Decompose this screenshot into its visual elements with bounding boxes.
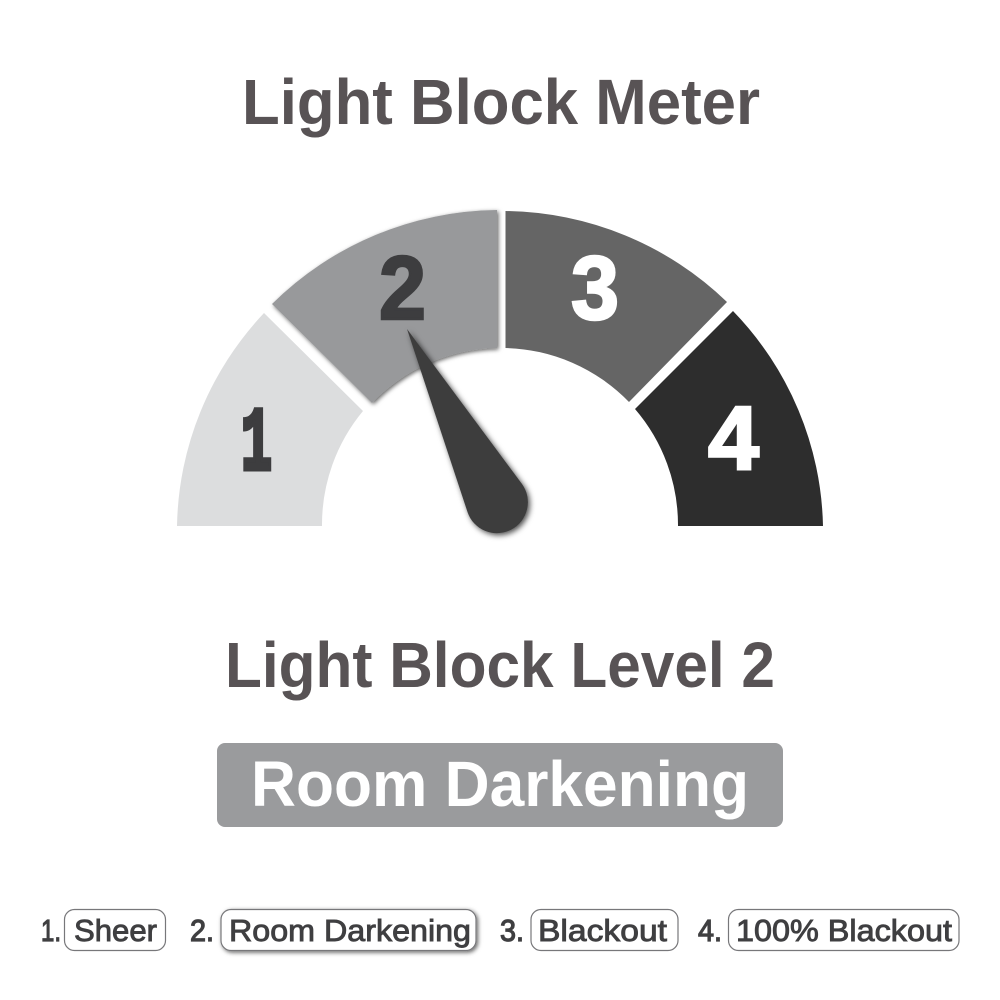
- level name badge: Room Darkening: [251, 748, 749, 820]
- legend item 2: [190, 910, 476, 950]
- legend item 4: 100% Blackout: [736, 913, 952, 948]
- legend item 1: [41, 910, 166, 950]
- legend item 1: Sheer: [74, 913, 157, 948]
- segment 2: room darkening: 2: [379, 239, 426, 339]
- segment 2: room darkening: [272, 210, 497, 403]
- needle pointing at level 2: [407, 329, 528, 533]
- legend item 2: Room Darkening: [229, 913, 471, 948]
- legend item 3: Blackout: [538, 913, 667, 948]
- level heading: Light Block Level 2: [225, 629, 775, 701]
- segment 4: 100% blackout: [635, 311, 823, 526]
- segment 4: 100% blackout: 4: [708, 389, 759, 489]
- legend item 2: 2.: [190, 913, 214, 948]
- legend item 1: 1.: [41, 913, 61, 948]
- legend: [41, 910, 959, 950]
- gauge meter: [177, 210, 823, 533]
- legend item 3: 3.: [500, 913, 524, 948]
- segment 3: blackout: [506, 211, 727, 402]
- legend item 4: [698, 910, 959, 950]
- segment 3: blackout: 3: [571, 239, 619, 339]
- segment 1: sheer: 1: [241, 395, 272, 497]
- legend item 4: 4.: [698, 913, 722, 948]
- legend item 3: [500, 910, 678, 950]
- segment 1: sheer: [177, 313, 363, 526]
- title: Light Block Meter: [242, 66, 760, 138]
